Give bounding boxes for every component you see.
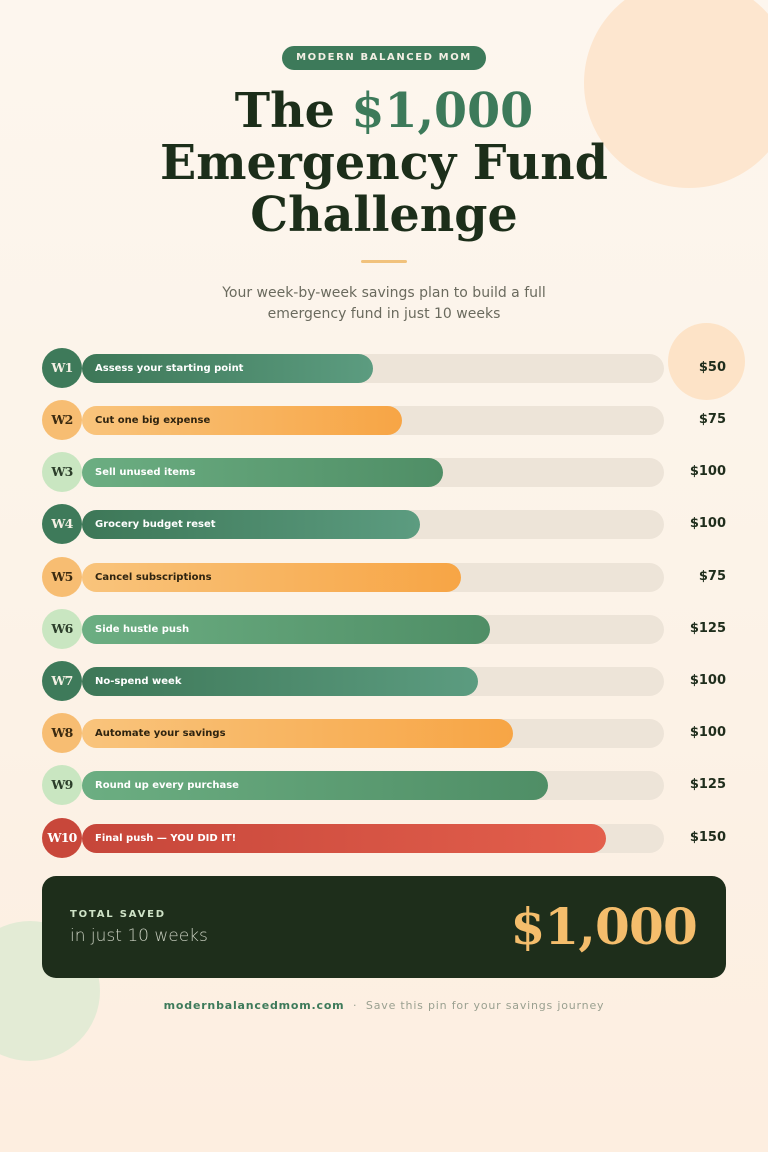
subtitle [222,285,546,322]
row W10: Final push — YOU DID IT! [95,832,236,844]
row W2: Cut one big expense [95,414,210,426]
row W10: $150 [690,830,726,845]
row W4: $100 [690,516,726,531]
total label: TOTAL SAVED [70,909,166,920]
row W3: Sell unused items [95,466,195,478]
title: Emergency Fund [160,135,608,191]
row W10 [42,818,726,858]
total subtext: in just 10 weeks [70,926,208,946]
row W1: W1 [51,360,73,375]
row W4: W4 [51,516,73,531]
row W10: W10 [47,830,77,845]
row W4 [42,504,726,544]
row W7: W7 [51,673,73,688]
row W8 [42,713,726,753]
row W3 [42,452,726,492]
row W4: Grocery budget reset [95,518,216,530]
total saved panel [42,876,726,978]
row W6: Side hustle push [95,624,189,634]
subtitle: emergency fund in just 10 weeks [268,306,500,322]
title: Challenge [250,187,518,243]
subtitle: Your week-by-week savings plan to build a full [222,285,546,301]
decorative circle behind W1 amount [668,323,745,400]
row W5: W5 [51,569,73,584]
week rows [42,348,726,858]
footer: modernbalancedmom.com · Save this pin for your savings journey [164,999,604,1012]
row W6 [42,609,726,649]
brand pill [282,46,486,70]
row W8: Automate your savings [95,728,226,738]
decorative circle top right [584,0,768,188]
row W3: W3 [51,464,73,479]
row W2 [42,400,726,440]
row W6: $125 [690,621,726,636]
row W7: $100 [690,673,726,688]
row W9: $125 [690,777,726,792]
row W5: Cancel subscriptions [95,572,212,582]
row W7: No-spend week [95,676,182,686]
title [160,83,608,243]
row W1: $50 [699,360,726,375]
row W7 [42,661,726,701]
total amount: $1,000 [510,897,697,956]
row W5: $75 [699,569,726,584]
row W1 [42,348,726,388]
row W8: W8 [51,725,73,740]
row W9 [42,765,726,805]
brand pill: MODERN BALANCED MOM [296,52,472,63]
title: The $1,000 [235,83,533,139]
row W9: W9 [51,777,73,792]
decorative circle left bottom [0,921,100,1061]
row W2: $75 [699,412,726,427]
row W8: $100 [690,725,726,740]
row W1: Assess your starting point [95,362,243,374]
row W3: $100 [690,464,726,479]
row W9: Round up every purchase [95,780,239,790]
row W5 [42,557,726,597]
row W6: W6 [51,621,73,636]
row W2: W2 [51,412,73,427]
divider [361,260,407,263]
